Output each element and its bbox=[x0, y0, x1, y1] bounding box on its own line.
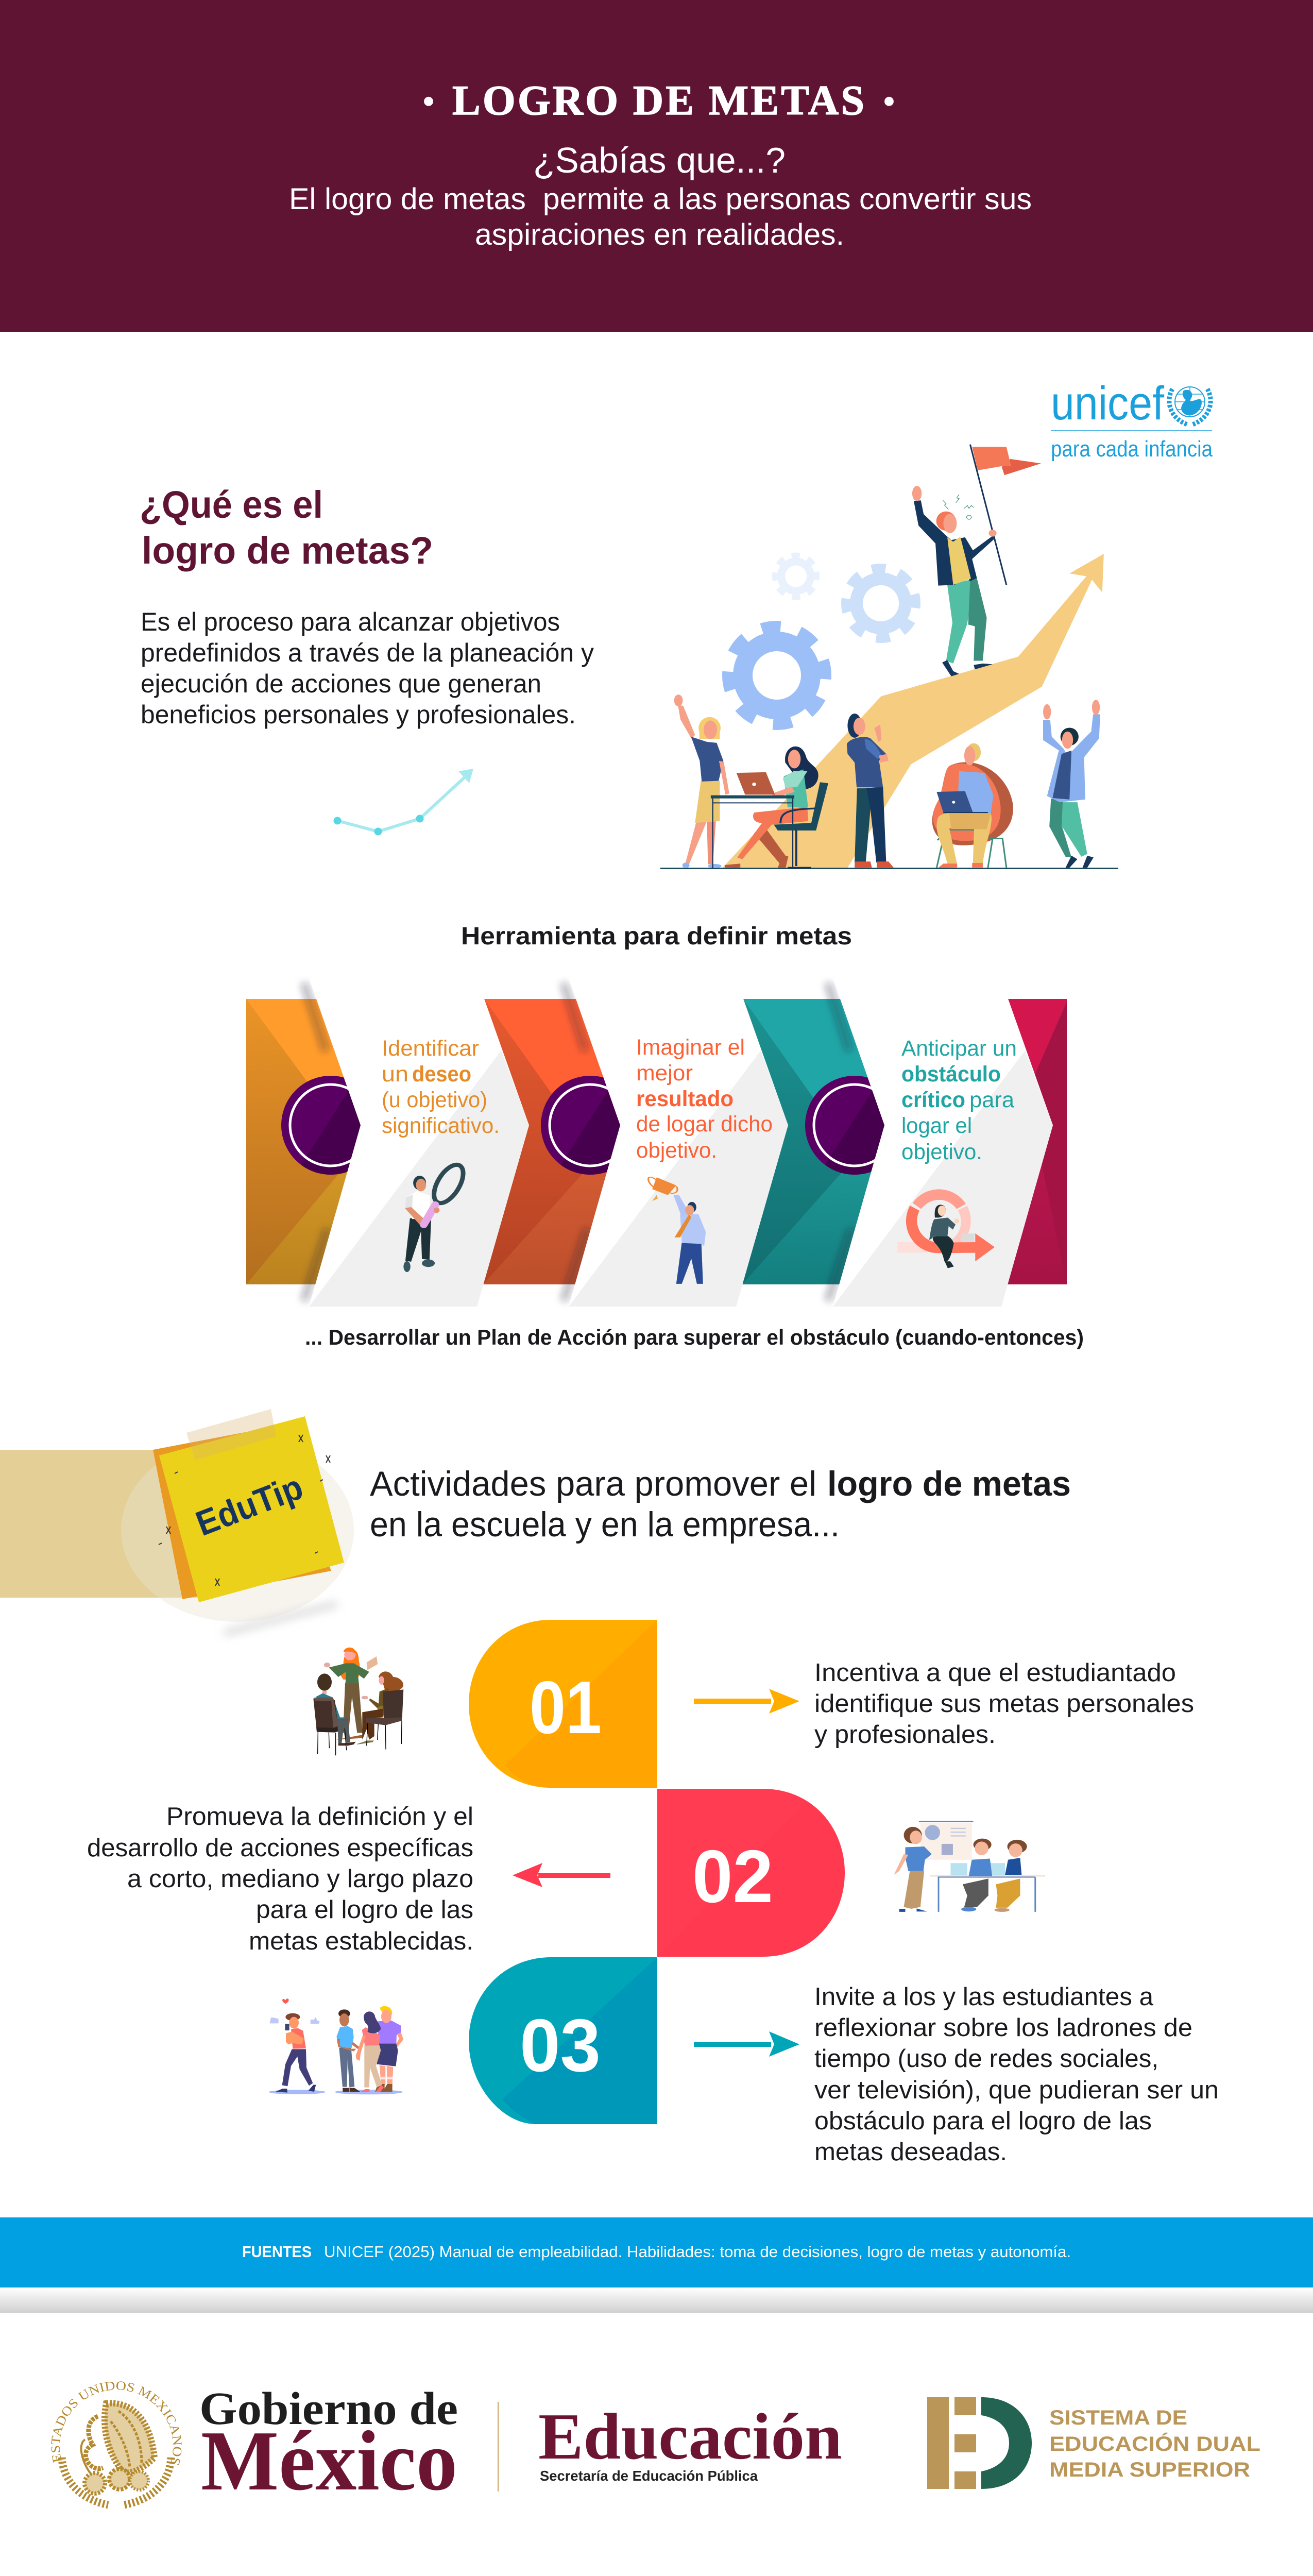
icon: gears bbox=[717, 551, 924, 735]
text 02: para el logro de las bbox=[256, 1896, 473, 1924]
heading: actividades: Actividades para promover el bbox=[370, 1464, 816, 1503]
person with laptop at desk bbox=[711, 747, 828, 869]
unicef logo: para cada infancia bbox=[1051, 436, 1213, 462]
chevron 1 bbox=[309, 978, 529, 1307]
icon: group meeting bbox=[313, 1648, 403, 1755]
icon: man with trophy bbox=[649, 1177, 706, 1284]
step 01 bbox=[469, 1620, 657, 1788]
caption: plan de accion: ... Desarrollar un Plan de Acción para superar el obstáculo (cuando-entonces) bbox=[305, 1325, 1084, 1349]
illustration: team and goal arrow bbox=[660, 445, 1118, 869]
panel: chevron process bbox=[246, 978, 1067, 1307]
icon: woman on loop arrow bbox=[897, 1189, 995, 1268]
text 03: reflexionar sobre los ladrones de bbox=[814, 2014, 1192, 2042]
text 01: y profesionales. bbox=[814, 1721, 996, 1749]
text: identificar: significativo. bbox=[382, 1113, 500, 1138]
step circle 2 bbox=[541, 1076, 620, 1175]
text: imaginar: objetivo. bbox=[636, 1138, 717, 1163]
text 01 bbox=[814, 1659, 1194, 1749]
logo: gobierno de mexico: Gobierno de bbox=[199, 2383, 458, 2434]
arrow 01 bbox=[694, 1689, 799, 1714]
logo: sistema dual: SISTEMA DE bbox=[1049, 2406, 1187, 2429]
intro text: aspiraciones en realidades. bbox=[475, 218, 844, 251]
arrow 02 bbox=[513, 1863, 610, 1887]
chevron shadows bbox=[304, 983, 851, 1301]
text: anticipar bbox=[901, 1036, 1017, 1164]
logo: sistema dual: EDUCACIÓN DUAL bbox=[1049, 2432, 1260, 2455]
person standing left bbox=[674, 694, 729, 868]
text: anticipar: Anticipar un bbox=[901, 1036, 1017, 1061]
heading: actividades: logro de metas bbox=[827, 1464, 1071, 1503]
cheering person bbox=[1043, 700, 1100, 868]
text 01: Incentiva a que el estudiantado bbox=[814, 1659, 1176, 1687]
icon: small rising arrow bbox=[334, 769, 473, 836]
arrow 03 bbox=[694, 2031, 799, 2057]
emblem: mexican coat of arms bbox=[52, 2381, 182, 2509]
emblem: mexican coat of arms: ESTADOS UNIDOS MEXICANOS bbox=[52, 2381, 182, 2465]
person with flag bbox=[912, 445, 1041, 676]
background band: orange bbox=[246, 999, 380, 1284]
text 03: ver televisión), que pudieran ser un bbox=[814, 2076, 1219, 2104]
edutip badge bbox=[0, 1409, 354, 1633]
edutip badge: EduTip bbox=[191, 1467, 308, 1544]
heading: actividades: en la escuela y en la empresa... bbox=[370, 1505, 840, 1544]
definition text: ejecución de acciones que generan bbox=[141, 669, 541, 698]
sources bar: UNICEF (2025) Manual de empleabilidad. Habilidades: toma de decisiones, logro de metas y autonomía. bbox=[324, 2243, 1071, 2261]
text: identificar: deseo bbox=[412, 1062, 471, 1087]
chevron 3 bbox=[833, 978, 1053, 1307]
text 01: identifique sus metas personales bbox=[814, 1690, 1194, 1718]
step circle 3 bbox=[805, 1076, 884, 1175]
text: identificar: (u objetivo) bbox=[382, 1088, 487, 1112]
header banner bbox=[0, 0, 1313, 332]
logo: gobierno de mexico: México bbox=[201, 2413, 457, 2508]
definition text: predefinidos a través de la planeación y bbox=[141, 638, 594, 667]
text: anticipar: para bbox=[969, 1088, 1014, 1112]
text 02: a corto, mediano y largo plazo bbox=[127, 1865, 473, 1893]
ground line bbox=[660, 868, 1118, 870]
text: identificar: un bbox=[382, 1062, 408, 1087]
definition text: Es el proceso para alcanzar objetivos bbox=[141, 607, 560, 636]
text 03: tiempo (uso de redes sociales, bbox=[814, 2045, 1158, 2073]
text: imaginar: resultado bbox=[636, 1087, 734, 1111]
intro text bbox=[289, 182, 1032, 251]
heading: que es bbox=[140, 483, 433, 572]
heading: que es: ¿Qué es el bbox=[140, 483, 323, 526]
person in armchair bbox=[932, 743, 1013, 868]
heading: herramienta: Herramienta para definir metas bbox=[461, 923, 852, 950]
intro text: El logro de metas permite a las personas convertir sus bbox=[289, 182, 1032, 216]
text: identificar bbox=[382, 1036, 500, 1138]
text: anticipar: logar el bbox=[901, 1113, 972, 1138]
text: anticipar: obstáculo bbox=[901, 1062, 1001, 1087]
step 03: 03 bbox=[520, 2004, 601, 2087]
logo: educacion: Secretaría de Educación Pública bbox=[540, 2468, 758, 2484]
definition text bbox=[141, 607, 594, 729]
step 01: 01 bbox=[530, 1666, 602, 1749]
logo: sistema dual bbox=[927, 2397, 1260, 2489]
sources bar bbox=[0, 2217, 1313, 2287]
text: imaginar: de logar dicho bbox=[636, 1112, 773, 1137]
text 02: metas establecidas. bbox=[249, 1927, 473, 1955]
background band: crimson bbox=[997, 999, 1067, 1284]
logo: educacion: Educación bbox=[538, 2400, 842, 2473]
text 02: Promueva la definición y el bbox=[166, 1803, 473, 1831]
background band: red bbox=[476, 999, 646, 1284]
icon: presentation team bbox=[894, 1822, 1045, 1912]
goal arrow bbox=[723, 554, 1104, 868]
heading: actividades bbox=[370, 1464, 1071, 1544]
unicef logo bbox=[1051, 377, 1213, 462]
heading: que es: logro de metas? bbox=[142, 529, 433, 572]
title: LOGRO DE METAS bbox=[452, 77, 864, 124]
text 02: desarrollo de acciones específicas bbox=[87, 1834, 473, 1862]
man looking up bbox=[847, 714, 894, 868]
text 03 bbox=[814, 1983, 1219, 2166]
text: imaginar: Imaginar el bbox=[636, 1035, 745, 1060]
step 02 bbox=[657, 1789, 845, 1957]
grey divider band bbox=[0, 2287, 1313, 2313]
step circle 1 bbox=[281, 1076, 361, 1175]
title: • bbox=[423, 84, 434, 118]
chevron 2 bbox=[569, 978, 788, 1307]
step 03 bbox=[469, 1957, 657, 2124]
definition text: beneficios personales y profesionales. bbox=[141, 700, 576, 729]
text 03: metas deseadas. bbox=[814, 2138, 1007, 2166]
title: • bbox=[883, 84, 895, 118]
text 02 bbox=[87, 1803, 473, 1955]
text: anticipar: objetivo. bbox=[901, 1140, 982, 1164]
icon: youth with phone bbox=[269, 1998, 403, 2094]
text: imaginar bbox=[636, 1035, 773, 1163]
text 03: obstáculo para el logro de las bbox=[814, 2107, 1152, 2135]
background band: teal bbox=[734, 999, 904, 1284]
subtitle: ¿Sabías que...? bbox=[533, 140, 786, 180]
sources bar: FUENTES bbox=[242, 2243, 312, 2261]
step 02: 02 bbox=[692, 1835, 773, 1918]
text: anticipar: crítico bbox=[901, 1088, 965, 1112]
text: identificar: Identificar bbox=[382, 1036, 479, 1061]
unicef logo: unicef bbox=[1051, 377, 1164, 430]
logo: sistema dual: MEDIA SUPERIOR bbox=[1049, 2459, 1250, 2481]
text 03: Invite a los y las estudiantes a bbox=[814, 1983, 1154, 2011]
icon: man with magnifier bbox=[403, 1161, 469, 1272]
text: imaginar: mejor bbox=[636, 1061, 693, 1086]
